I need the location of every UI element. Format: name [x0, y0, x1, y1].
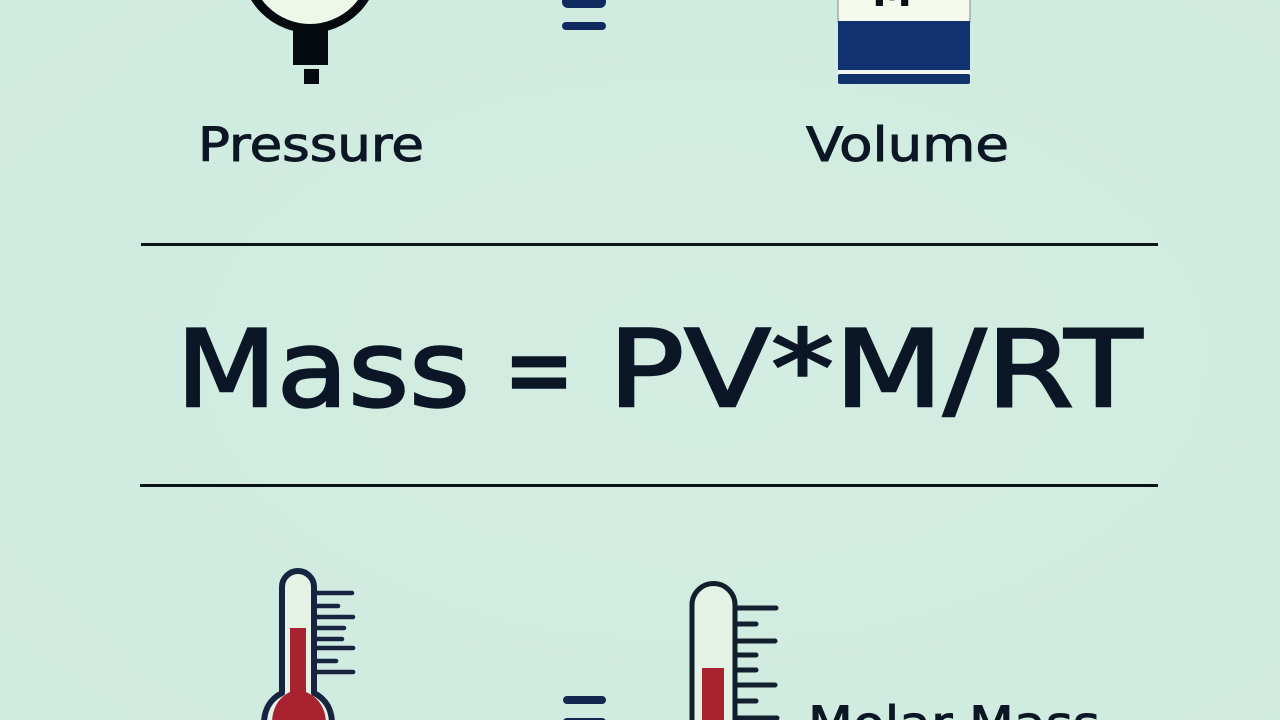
icon: pressure gauge: [246, 0, 374, 84]
divider: lower rule: [140, 484, 1158, 487]
icon: volume container: [838, 0, 970, 84]
divider: upper rule: [141, 243, 1158, 246]
formula: Mass = PV*M/RT: =: [504, 308, 574, 431]
formula: Mass = PV*M/RT: PV*M/RT: [608, 308, 1143, 431]
icon: top equals sign: [562, 0, 606, 30]
icon: molar mass thermometer: [692, 584, 777, 720]
label: Volume: Volume: [806, 118, 1009, 173]
formula: Mass = PV*M/RT: [176, 308, 1143, 431]
icon: bottom equals sign: [563, 696, 606, 720]
formula: Mass = PV*M/RT: Mass: [176, 308, 470, 431]
icon: temperature thermometer: [264, 571, 353, 720]
label: Pressure: Pressure: [198, 118, 424, 173]
